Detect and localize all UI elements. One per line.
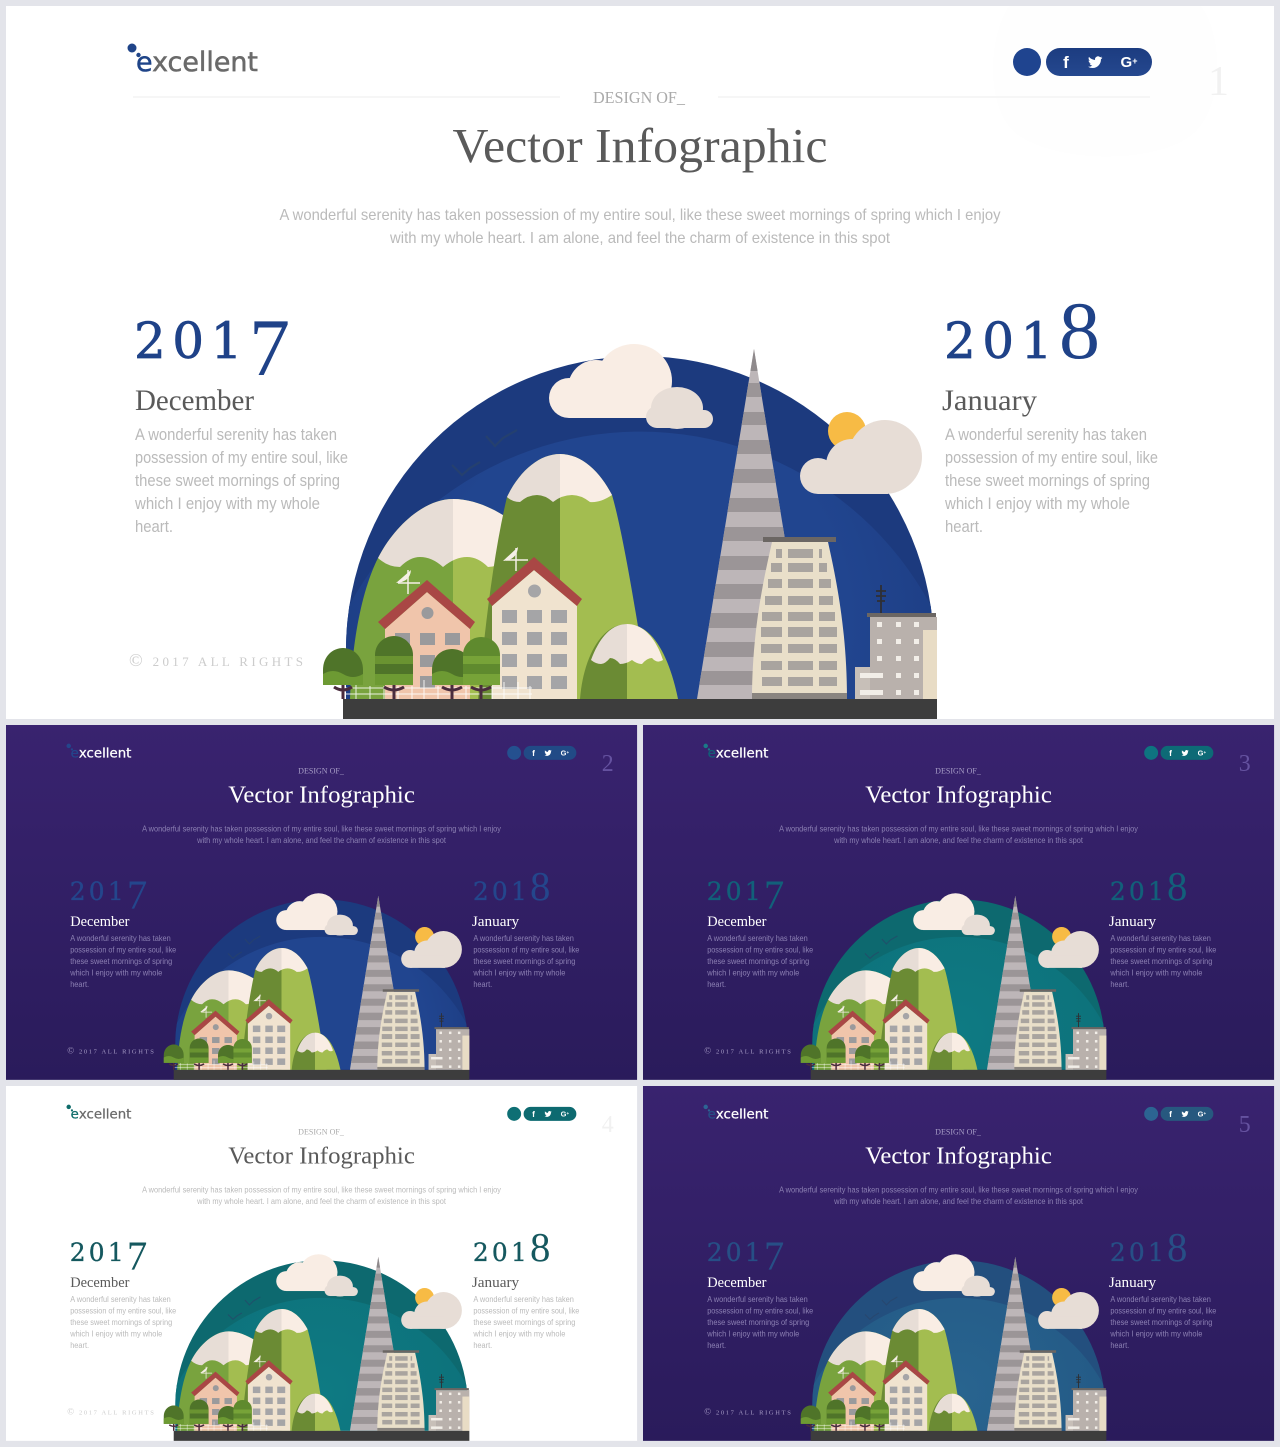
intro text: A wonderful serenity has taken possession of my entire soul, like these sweet mornings of spring which I enjoy xyxy=(779,825,1138,834)
right paragraph xyxy=(944,426,1158,536)
left paragraph: these sweet mornings of spring xyxy=(707,1318,810,1327)
eyebrow: DESIGN OF_ xyxy=(935,1126,982,1136)
logo: excellent xyxy=(71,1107,131,1122)
eyebrow: DESIGN OF_ xyxy=(935,765,982,775)
slide 5: purple steel-blue version xyxy=(643,1086,1274,1441)
social buttons xyxy=(507,1107,576,1121)
house: cream xyxy=(487,557,582,699)
dome: blue xyxy=(346,357,932,699)
left paragraph xyxy=(69,1295,177,1350)
illustration: city scene xyxy=(164,1254,469,1441)
social buttons xyxy=(507,746,576,760)
right paragraph: these sweet mornings of spring xyxy=(945,472,1150,490)
social buttons: G xyxy=(561,748,567,757)
left paragraph: these sweet mornings of spring xyxy=(70,1318,173,1327)
left paragraph: possession of my entire soul, like xyxy=(707,1306,814,1315)
social buttons: + xyxy=(567,1111,570,1116)
slide number: 1 xyxy=(1208,59,1229,105)
month December: December xyxy=(707,914,766,930)
social buttons: + xyxy=(1204,750,1207,755)
social buttons: f xyxy=(1169,748,1172,758)
intro text xyxy=(779,825,1138,845)
right paragraph xyxy=(1109,934,1217,989)
intro text xyxy=(779,1186,1138,1206)
right paragraph xyxy=(1109,1295,1217,1350)
logo: excellent xyxy=(136,47,258,78)
right paragraph: possession of my entire soul, like xyxy=(945,449,1158,467)
left paragraph: possession of my entire soul, like xyxy=(135,449,348,467)
left paragraph: A wonderful serenity has taken xyxy=(70,934,171,943)
year 2018: 2018 xyxy=(473,864,550,909)
intro text xyxy=(142,1186,501,1206)
copyright: © 2017 ALL RIGHTS xyxy=(67,1045,154,1055)
intro text: with my whole heart. I am alone, and feel the charm of existence in this spot xyxy=(833,1197,1084,1206)
birds xyxy=(452,430,517,475)
social buttons: G xyxy=(561,1109,567,1118)
copyright: © 2017 ALL RIGHTS xyxy=(704,1406,791,1416)
right paragraph: heart. xyxy=(1110,980,1129,989)
copyright: © 2017 ALL RIGHTS xyxy=(67,1406,154,1416)
icon: sun xyxy=(828,412,866,450)
slide 1: large white blue version xyxy=(6,6,1274,719)
left paragraph xyxy=(706,934,814,989)
social buttons: G xyxy=(1198,1109,1204,1118)
eyebrow: DESIGN OF_ xyxy=(298,765,345,775)
right paragraph: which I enjoy with my whole xyxy=(472,968,566,977)
slide number: 3 xyxy=(1239,751,1251,777)
fence xyxy=(345,680,532,699)
right paragraph: possession of my entire soul, like xyxy=(1110,1306,1217,1315)
month January: January xyxy=(472,1275,520,1291)
illustration: city scene xyxy=(801,893,1106,1080)
left paragraph: heart. xyxy=(70,980,89,989)
left paragraph: which I enjoy with my whole xyxy=(69,968,163,977)
left paragraph: possession of my entire soul, like xyxy=(70,1306,177,1315)
slide 4: white teal version xyxy=(6,1086,637,1441)
dome: teal xyxy=(812,900,1104,1070)
slide number: 5 xyxy=(1239,1112,1251,1138)
year 2017: 201 xyxy=(707,1238,764,1267)
left paragraph: heart. xyxy=(135,518,173,536)
intro text: with my whole heart. I am alone, and feel the charm of existence in this spot xyxy=(196,836,447,845)
year 2017: 201 xyxy=(707,877,764,906)
dome: blue xyxy=(175,900,467,1070)
tower xyxy=(690,345,820,705)
month January: January xyxy=(472,914,520,930)
left paragraph: these sweet mornings of spring xyxy=(70,957,173,966)
title: Vector Infographic xyxy=(865,782,1052,809)
right paragraph: A wonderful serenity has taken xyxy=(473,1295,574,1304)
right paragraph: possession of my entire soul, like xyxy=(1110,945,1217,954)
left paragraph: heart. xyxy=(707,1341,726,1350)
year 2017: 7 xyxy=(249,302,290,393)
left paragraph: which I enjoy with my whole xyxy=(134,495,320,513)
copyright: © 2017 ALL RIGHTS xyxy=(704,1045,791,1055)
left paragraph: A wonderful serenity has taken xyxy=(707,1295,808,1304)
intro text: with my whole heart. I am alone, and feel the charm of existence in this spot xyxy=(833,836,1084,845)
right paragraph: heart. xyxy=(945,518,983,536)
year 2017: 7 xyxy=(127,1234,147,1279)
social buttons: G xyxy=(1121,54,1132,71)
intro text xyxy=(142,825,501,845)
title: Vector Infographic xyxy=(452,118,828,173)
social buttons: G xyxy=(1198,748,1204,757)
left paragraph: A wonderful serenity has taken xyxy=(135,426,337,444)
month December: December xyxy=(707,1275,766,1291)
right paragraph: possession of my entire soul, like xyxy=(473,1306,580,1315)
eyebrow: DESIGN OF_ xyxy=(298,1126,345,1136)
right paragraph: A wonderful serenity has taken xyxy=(1110,1295,1211,1304)
mountain: centre xyxy=(478,454,650,699)
year 2017: 201 xyxy=(70,877,127,906)
left paragraph: possession of my entire soul, like xyxy=(70,945,177,954)
year 2017: 7 xyxy=(764,873,784,918)
social buttons xyxy=(1144,746,1213,760)
left paragraph: which I enjoy with my whole xyxy=(706,968,800,977)
house: peach xyxy=(378,580,475,699)
left paragraph: these sweet mornings of spring xyxy=(135,472,340,490)
month January: January xyxy=(1109,1275,1157,1291)
social buttons: f xyxy=(532,748,535,758)
dome: steel blue xyxy=(812,1260,1104,1431)
intro text xyxy=(280,207,1000,247)
right paragraph: these sweet mornings of spring xyxy=(473,1318,576,1327)
illustration: city scene xyxy=(801,1254,1106,1441)
illustration: city scene xyxy=(323,344,937,719)
left paragraph: heart. xyxy=(70,1341,89,1350)
right paragraph xyxy=(472,1295,580,1350)
illustration: city scene xyxy=(164,893,469,1080)
cloud: right xyxy=(800,420,922,494)
cloud: large xyxy=(549,344,672,418)
right paragraph: these sweet mornings of spring xyxy=(473,957,576,966)
intro text: A wonderful serenity has taken possession of my entire soul, like these sweet mornings of spring which I enjoy xyxy=(779,1186,1138,1195)
right paragraph: heart. xyxy=(473,980,492,989)
logo: excellent xyxy=(708,1107,768,1122)
intro text: A wonderful serenity has taken possession of my entire soul, like these sweet mornings of spring which I enjoy xyxy=(142,825,501,834)
intro text: A wonderful serenity has taken possession of my entire soul, like these sweet mornings of spring which I enjoy xyxy=(142,1186,501,1195)
mountain: left xyxy=(350,499,525,699)
month January: January xyxy=(942,384,1037,417)
small building xyxy=(855,585,937,699)
month January: January xyxy=(1109,914,1157,930)
social buttons: f xyxy=(532,1109,535,1119)
intro text: with my whole heart. I am alone, and feel the charm of existence in this spot xyxy=(196,1197,447,1206)
left paragraph xyxy=(706,1295,814,1350)
slide number: 2 xyxy=(602,751,614,777)
month December: December xyxy=(70,1275,129,1291)
mountain: small xyxy=(580,624,678,699)
year 2018: 2018 xyxy=(944,285,1100,376)
left paragraph: which I enjoy with my whole xyxy=(69,1329,163,1338)
office building xyxy=(752,537,847,699)
cloud: small xyxy=(646,387,713,429)
logo: excellent xyxy=(708,746,768,761)
right paragraph: which I enjoy with my whole xyxy=(1109,1329,1203,1338)
left paragraph: which I enjoy with my whole xyxy=(706,1329,800,1338)
slide 3: purple teal version xyxy=(643,725,1274,1080)
social buttons: + xyxy=(1132,56,1137,66)
title: Vector Infographic xyxy=(865,1143,1052,1170)
left paragraph xyxy=(69,934,177,989)
left paragraph: possession of my entire soul, like xyxy=(707,945,814,954)
year 2018: 2018 xyxy=(473,1225,550,1270)
right paragraph: A wonderful serenity has taken xyxy=(945,426,1147,444)
title: Vector Infographic xyxy=(228,782,415,809)
right paragraph: A wonderful serenity has taken xyxy=(1110,934,1211,943)
year 2018: 2018 xyxy=(1110,1225,1187,1270)
slide number: 4 xyxy=(602,1112,614,1138)
left paragraph: heart. xyxy=(707,980,726,989)
year 2017: 7 xyxy=(764,1234,784,1279)
year 2017: 201 xyxy=(70,1238,127,1267)
right paragraph: A wonderful serenity has taken xyxy=(473,934,574,943)
right paragraph: which I enjoy with my whole xyxy=(944,495,1130,513)
title: Vector Infographic xyxy=(228,1143,415,1170)
intro text: with my whole heart. I am alone, and feel the charm of existence in this spot xyxy=(389,230,891,247)
right paragraph xyxy=(472,934,580,989)
copyright: © 2017 ALL RIGHTS xyxy=(129,650,303,670)
social buttons xyxy=(1013,48,1152,76)
social buttons: f xyxy=(1063,53,1069,72)
right paragraph: possession of my entire soul, like xyxy=(473,945,580,954)
right paragraph: which I enjoy with my whole xyxy=(1109,968,1203,977)
slide 2: purple blue version xyxy=(6,725,637,1080)
left paragraph: A wonderful serenity has taken xyxy=(707,934,808,943)
trees xyxy=(323,636,500,699)
month December: December xyxy=(135,384,254,417)
logo: excellent xyxy=(71,746,131,761)
social buttons: f xyxy=(1169,1109,1172,1119)
social buttons: + xyxy=(1204,1111,1207,1116)
year 2017: 201 xyxy=(134,312,249,370)
icon: satellite dishes xyxy=(396,547,528,594)
year 2017: 7 xyxy=(127,873,147,918)
dome: teal xyxy=(175,1260,467,1431)
left paragraph xyxy=(134,426,348,536)
left paragraph: A wonderful serenity has taken xyxy=(70,1295,171,1304)
right paragraph: these sweet mornings of spring xyxy=(1110,957,1213,966)
month December: December xyxy=(70,914,129,930)
ground xyxy=(343,699,937,719)
right paragraph: which I enjoy with my whole xyxy=(472,1329,566,1338)
intro text: A wonderful serenity has taken possession of my entire soul, like these sweet mornings of spring which I enjoy xyxy=(280,207,1000,224)
eyebrow: DESIGN OF_ xyxy=(593,88,685,107)
year 2018: 2018 xyxy=(1110,864,1187,909)
right paragraph: these sweet mornings of spring xyxy=(1110,1318,1213,1327)
social buttons: + xyxy=(567,750,570,755)
right paragraph: heart. xyxy=(1110,1341,1129,1350)
right paragraph: heart. xyxy=(473,1341,492,1350)
left paragraph: these sweet mornings of spring xyxy=(707,957,810,966)
social buttons xyxy=(1144,1107,1213,1121)
